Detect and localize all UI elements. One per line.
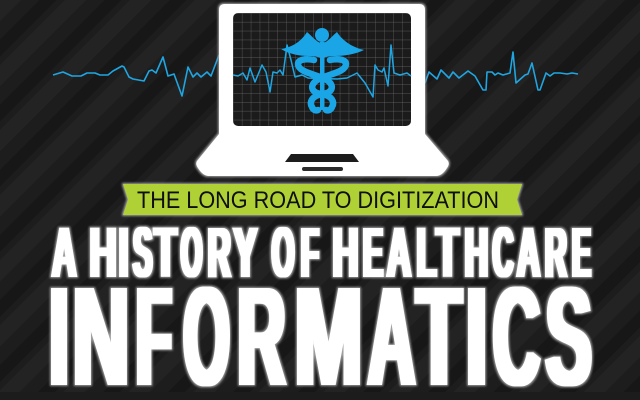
subtitle text: THE LONG ROAD TO DIGITIZATION <box>137 187 499 214</box>
title line 1: R <box>208 214 231 293</box>
title line 1: A <box>52 214 76 293</box>
title line 1: Y <box>234 214 257 293</box>
title line 1: H <box>333 214 358 293</box>
title line 1: A <box>387 214 411 293</box>
title line 1: A <box>517 214 540 293</box>
title line 1: O <box>181 214 202 293</box>
title line 1: I <box>119 214 128 293</box>
title line 1: C <box>493 214 513 293</box>
banner: subtitle ribbon <box>123 184 522 215</box>
trackpad <box>285 154 359 162</box>
laptop <box>196 4 449 176</box>
title line 1: O <box>272 214 294 293</box>
icon: caduceus <box>281 28 364 110</box>
title line 1: L <box>417 214 436 293</box>
ECG line: left <box>53 55 219 96</box>
title line 1: S <box>133 214 152 293</box>
power bar <box>302 167 343 171</box>
title line 1: E <box>363 214 383 293</box>
title line 1: T <box>154 214 177 293</box>
ribbon shape <box>123 184 522 215</box>
infographic header: E <box>572 214 591 293</box>
laptop body <box>196 4 449 176</box>
title line 1: R <box>545 214 567 293</box>
title line 1: T <box>436 214 459 293</box>
ECG line: right <box>425 52 578 90</box>
laptop screen <box>233 13 411 126</box>
title line 1: H <box>465 214 488 293</box>
ECG line: on screen <box>233 45 411 97</box>
title line 1: F <box>301 214 319 293</box>
title line 1: H <box>90 214 117 293</box>
